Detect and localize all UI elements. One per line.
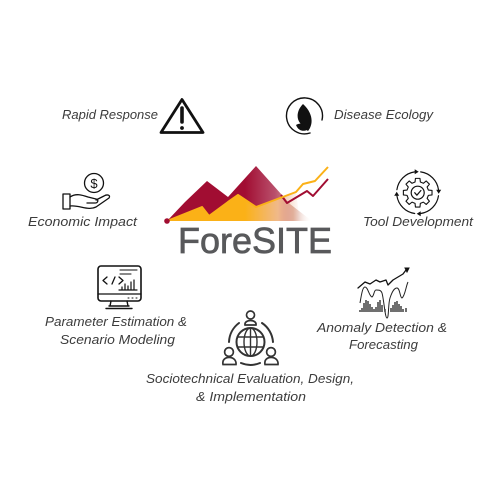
label: Parameter Estimation and Scenario Modeling: Scenario Modeling [60,332,176,347]
label: Sociotechnical Evaluation, Design, and Implementation: & Implementation [196,389,306,404]
logo: ForeSITE [164,166,332,261]
label: Sociotechnical Evaluation, Design, and Implementation [146,371,354,404]
yellow area [167,192,300,221]
label: Anomaly Detection and Forecasting: Anomaly Detection & [316,320,447,335]
icon: gear with check [394,169,441,216]
start point [164,218,170,224]
label: Anomaly Detection and Forecasting: Forecasting [349,337,419,352]
red trend line [281,179,328,203]
icon: anomaly chart [358,268,409,318]
icon: hand with coin: $ [90,176,98,191]
icon: monitor with code [98,266,141,308]
label: Anomaly Detection and Forecasting [316,320,447,352]
label: Rapid Response: Rapid Response [62,107,158,122]
yellow trend line [167,167,328,221]
label: Parameter Estimation and Scenario Modeling: Parameter Estimation & [45,314,187,329]
icon: hand with coin [63,174,110,209]
icon: leaf in circle [286,98,322,134]
label: Tool Development: Tool Development [363,214,474,229]
label: Sociotechnical Evaluation, Design, and Implementation: Sociotechnical Evaluation, Design, [146,371,354,386]
label: Economic Impact: Economic Impact [28,214,139,229]
label: Disease Ecology: Disease Ecology [334,107,435,122]
icon: warning triangle [161,100,203,132]
red mountain area [167,166,312,221]
icon: globe with people [223,311,278,365]
logo wordmark: ForeSITE [178,220,332,261]
label: Parameter Estimation and Scenario Modeling [45,314,187,347]
